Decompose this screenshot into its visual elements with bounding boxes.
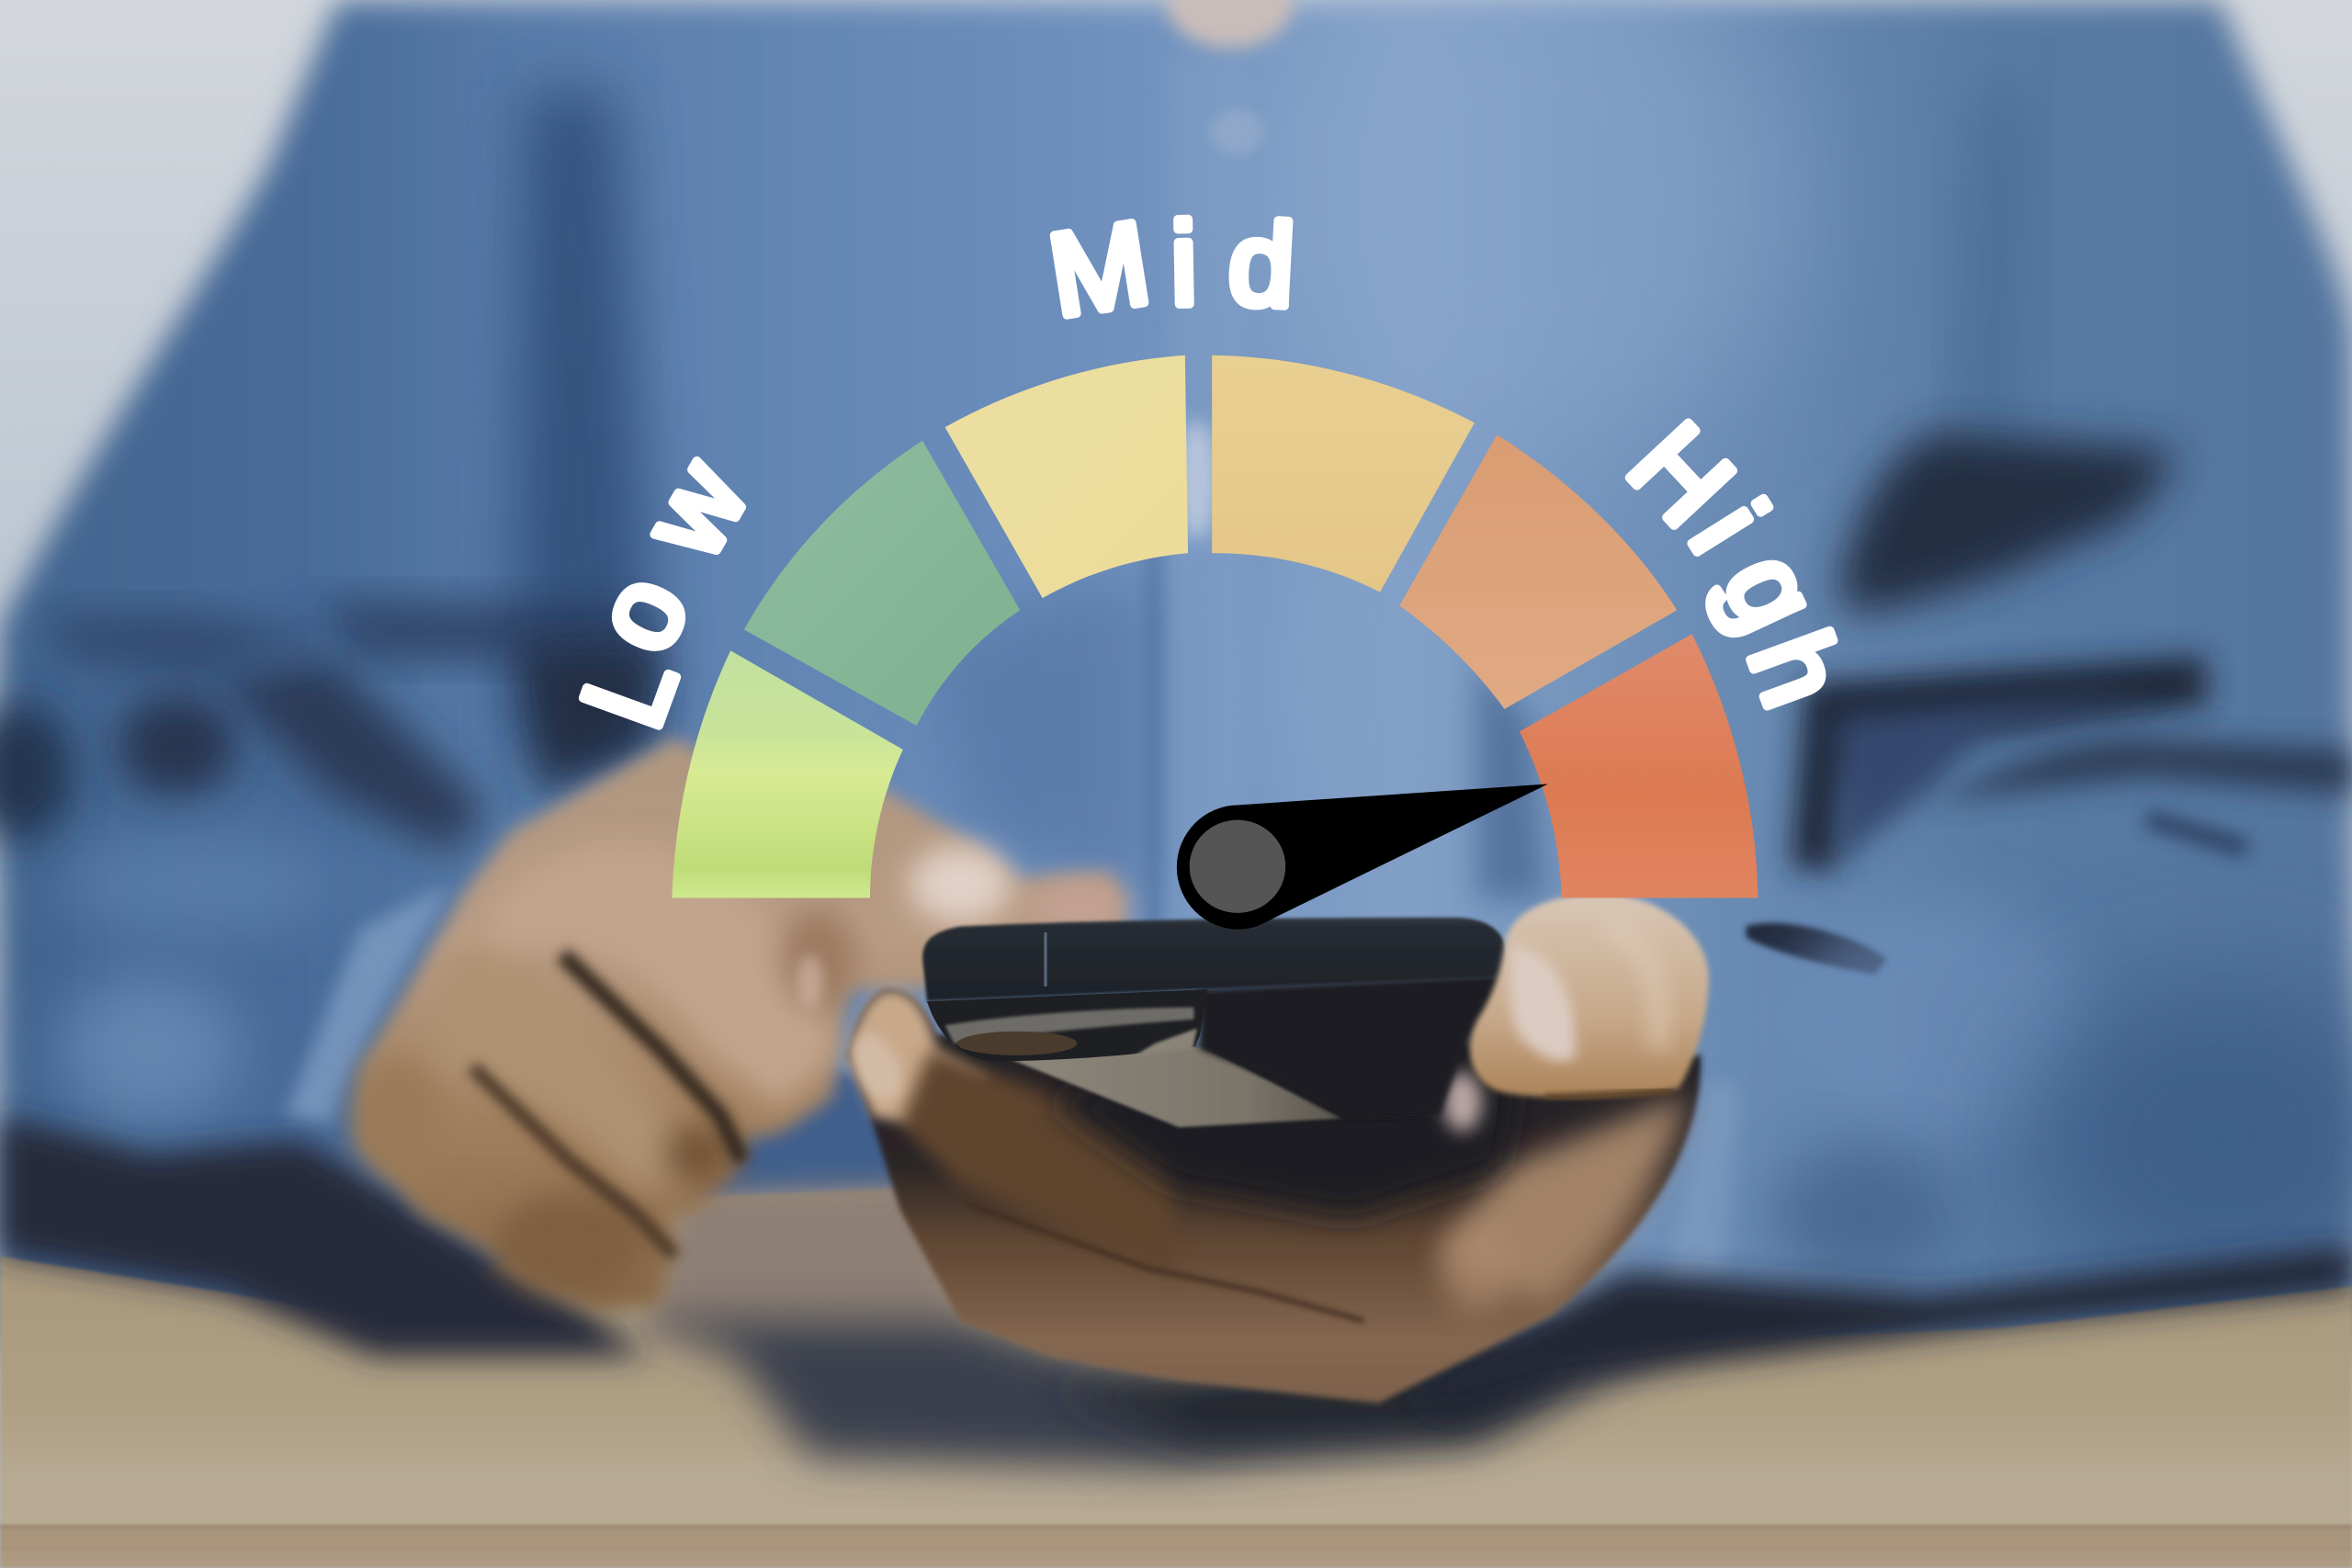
table grain	[0, 1454, 2352, 1550]
collar	[1167, 0, 1293, 48]
segment: green	[744, 441, 1020, 726]
gauge label: Mid: Mid	[1041, 197, 1297, 341]
phone top band	[922, 918, 1506, 1001]
shirt hem and table shadow	[0, 1117, 2352, 1469]
needle	[1177, 784, 1548, 930]
palm highlights	[1440, 1094, 1688, 1304]
index finger tip	[847, 989, 990, 1124]
left hand highlights	[353, 842, 1125, 1295]
table	[0, 1184, 2352, 1568]
camera module	[927, 989, 1207, 1061]
gauge label: Low: Low	[556, 438, 773, 743]
segment: pale yellow	[945, 355, 1188, 598]
left hand	[353, 738, 1125, 1310]
back of left hand	[360, 738, 1125, 1310]
gap between hands	[645, 1072, 960, 1334]
antenna line	[1044, 932, 1047, 987]
smartphone	[922, 918, 1506, 1127]
left hand finger creases	[562, 955, 742, 1162]
shadow under phone	[1050, 1020, 1515, 1217]
phone back light panel	[1008, 1046, 1342, 1127]
right hand	[843, 989, 1701, 1403]
finger nail	[843, 1026, 911, 1109]
segment: yellow	[1212, 355, 1475, 592]
segment: light green	[672, 650, 903, 898]
gauge	[556, 197, 1869, 930]
phone dark body	[1200, 975, 1505, 1118]
segment: red	[1520, 634, 1758, 898]
thumb nail	[1510, 944, 1576, 1061]
palm and fingers	[847, 989, 1701, 1403]
index finger shading	[900, 1049, 1176, 1274]
right thumb	[1470, 894, 1709, 1098]
needle hub	[1190, 820, 1285, 913]
finger crease	[967, 1203, 1363, 1321]
gauge label: High: High	[1605, 399, 1869, 722]
needle pointer	[1177, 784, 1548, 930]
segment: orange	[1399, 434, 1677, 709]
